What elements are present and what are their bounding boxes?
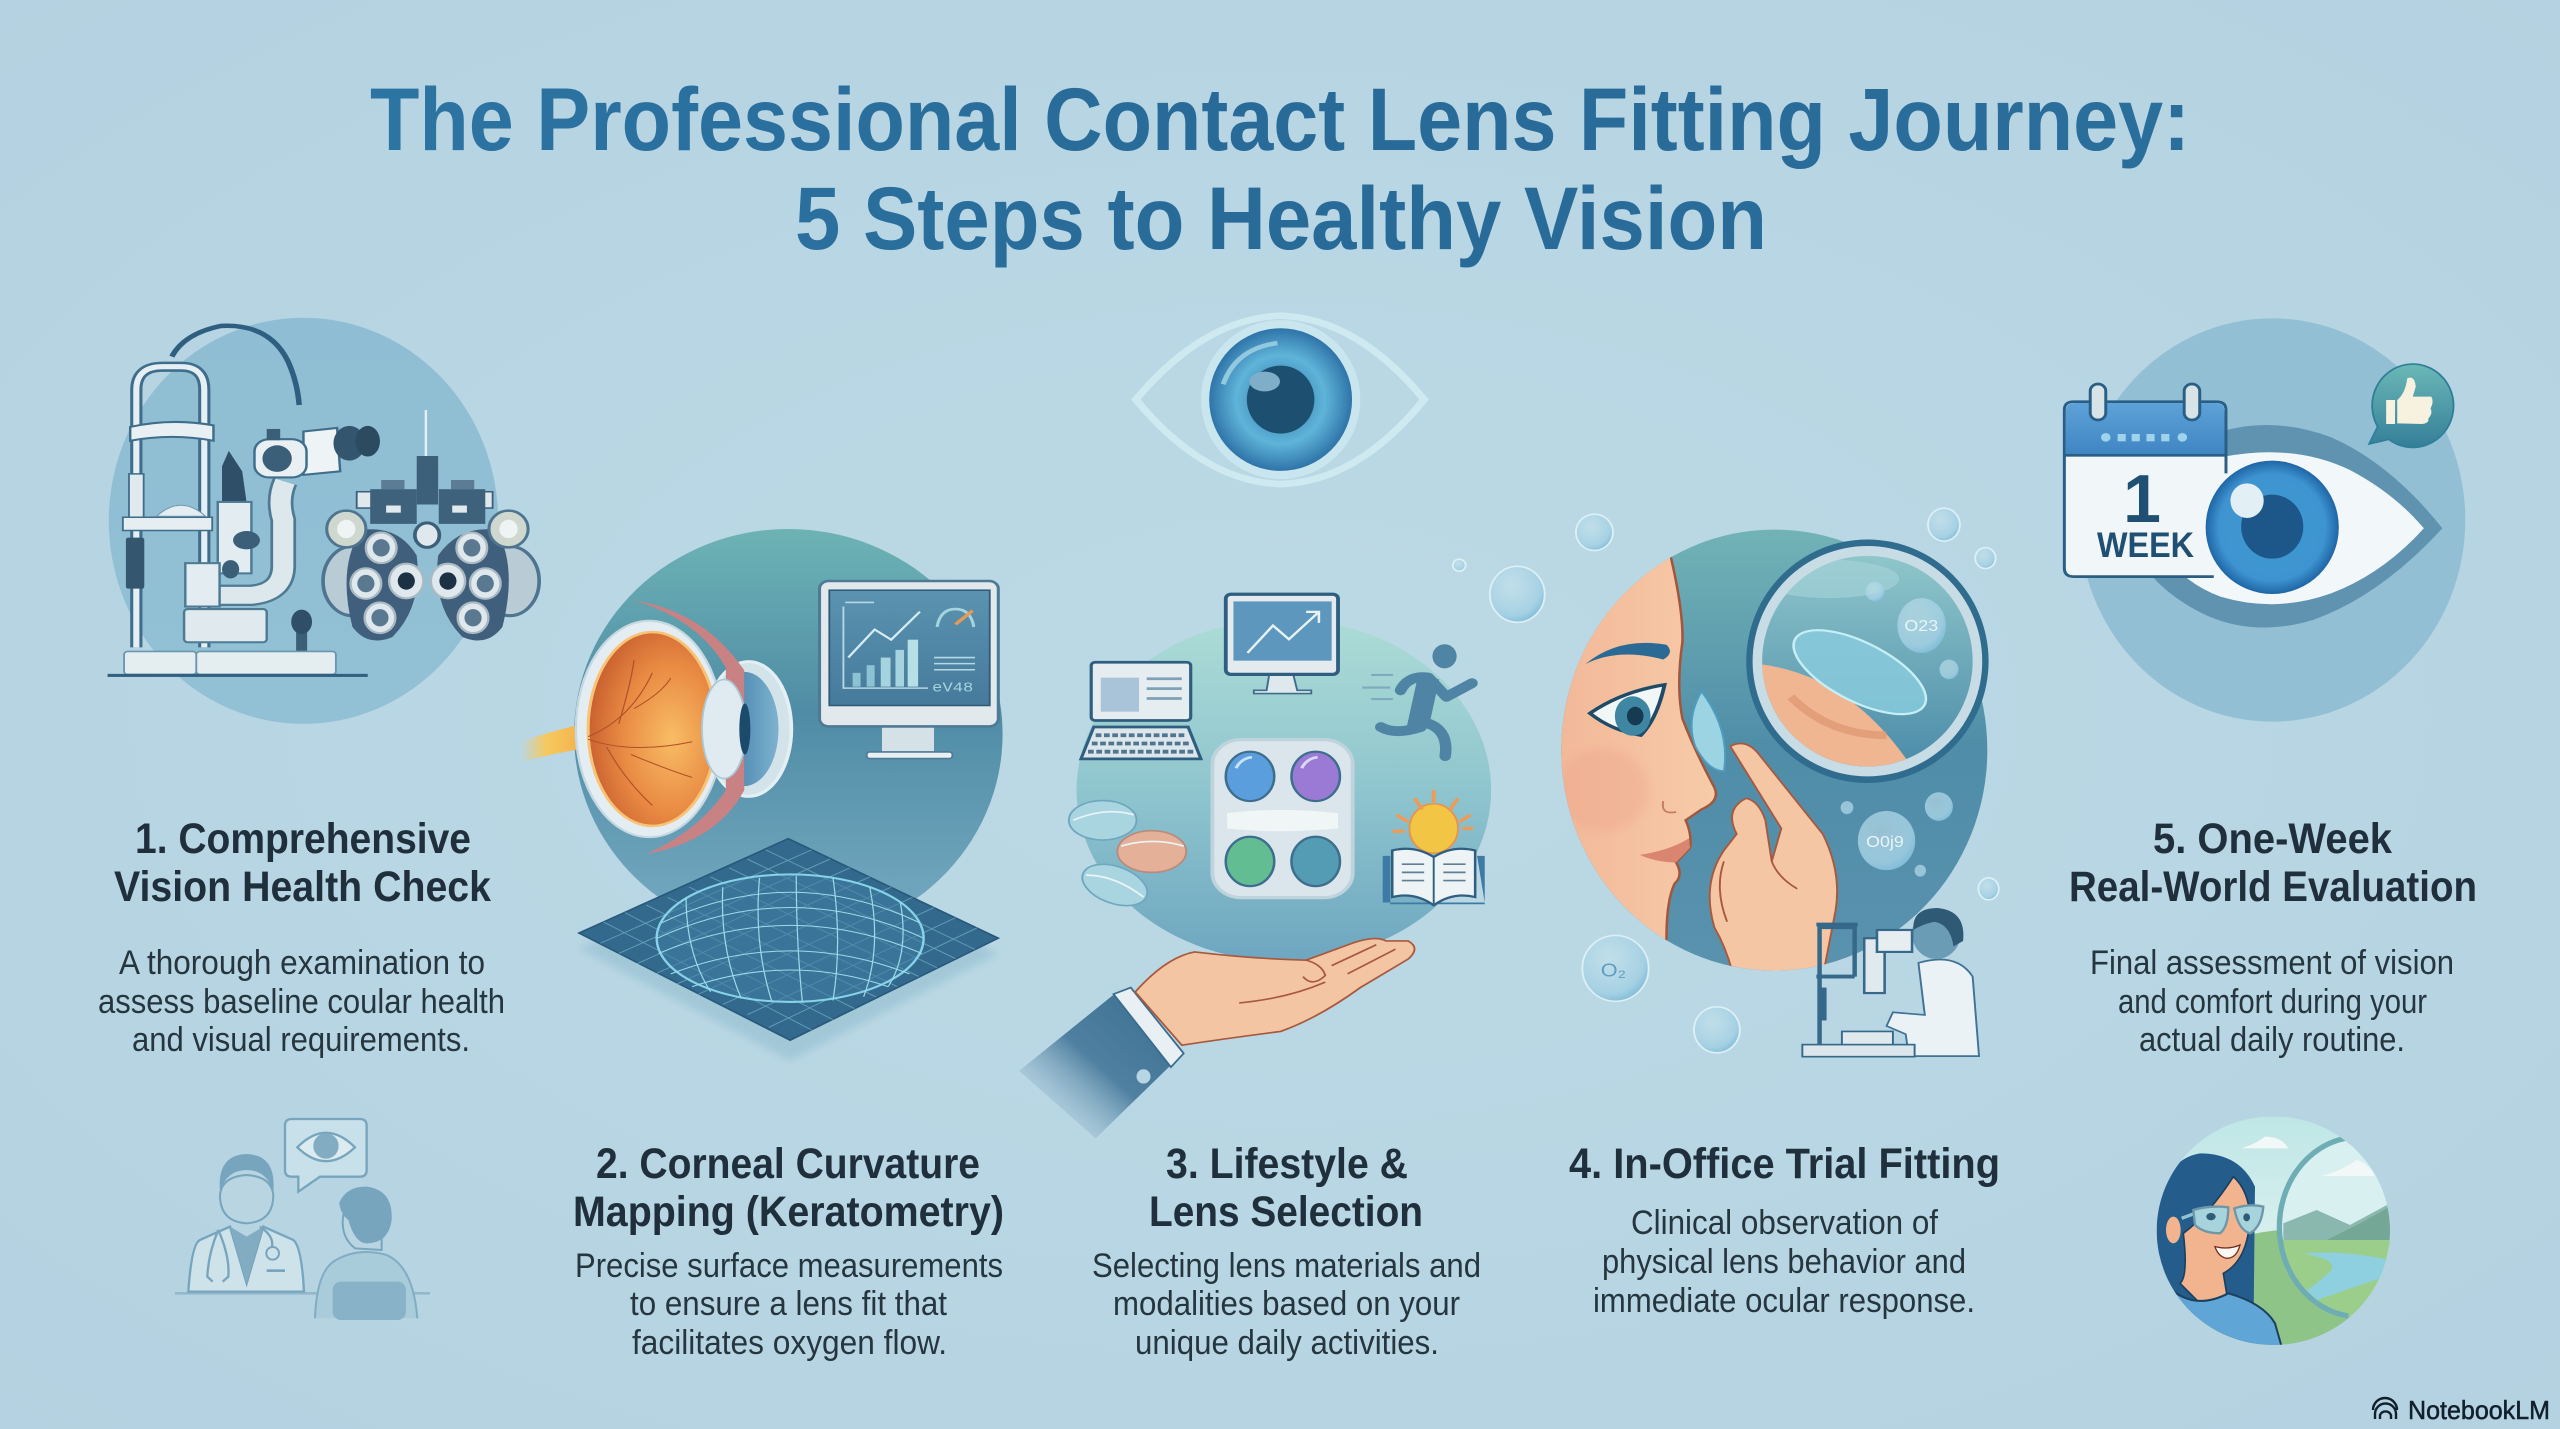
- step 5 text: 5. One-Week: [2153, 815, 2392, 863]
- icon: laptop: [1081, 662, 1201, 759]
- icon: book and sun: [1383, 790, 1485, 905]
- icon: hand: [1710, 743, 1837, 977]
- step 1 text: A thorough examination to: [119, 944, 485, 982]
- corneal topography plate: [579, 839, 998, 1061]
- panel: step 2 illustration, eye anatomy and corneal map: [521, 529, 1003, 1061]
- face profile: [1561, 556, 1718, 941]
- NotebookLM logo: NotebookLM: [2408, 1395, 2550, 1425]
- step 1 text: [98, 815, 505, 1059]
- icon: eye anatomy: [521, 600, 791, 854]
- icon: monitor: [1226, 594, 1338, 694]
- calendar text: [2097, 461, 2194, 565]
- icon: iris: [2206, 461, 2339, 594]
- step 3 text: modalities based on your: [1113, 1285, 1460, 1323]
- step 1 text: Vision Health Check: [114, 863, 491, 911]
- icon: central eye: [1136, 316, 1424, 484]
- step 5 text: [2069, 815, 2477, 1059]
- icon: lens on fingertip: [1692, 691, 1725, 771]
- icon: contact lenses: [1069, 801, 1186, 914]
- icon: woman with landscape view: [2157, 1117, 2390, 1347]
- step 2 text: to ensure a lens fit that: [630, 1285, 948, 1323]
- slit lamp: [108, 326, 380, 677]
- panel: step 1 illustration, slit lamp and phoropter: [108, 318, 539, 724]
- calendar text: WEEK: [2097, 526, 2194, 565]
- step 3 text: Selecting lens materials and: [1092, 1247, 1481, 1285]
- step 3 text: unique daily activities.: [1135, 1324, 1439, 1362]
- step 2 text: [573, 1140, 1004, 1362]
- icon: lens case: [1212, 740, 1353, 898]
- calendar text: 1: [2123, 461, 2161, 537]
- phoropter: [323, 410, 539, 641]
- step 3 text: [1092, 1140, 1481, 1362]
- panel: step 4 illustration, in-office trial fitting: [1453, 508, 1999, 1057]
- step 3 text: Lens Selection: [1149, 1188, 1423, 1236]
- step 4 text: Clinical observation of: [1631, 1204, 1938, 1242]
- step 4 text: physical lens behavior and: [1602, 1243, 1966, 1281]
- title: 5 Steps to Healthy Vision: [795, 168, 1767, 268]
- icon: calendar: [2064, 384, 2226, 577]
- oxygen bubbles inside circle: O0j9: [1866, 833, 1904, 851]
- step 1 text: 1. Comprehensive: [135, 815, 471, 863]
- title: The Professional Contact Lens Fitting Journey:: [370, 69, 2190, 169]
- step 5 text: actual daily routine.: [2139, 1021, 2405, 1059]
- icon: runner: [1362, 644, 1472, 756]
- icon: open hand: [1019, 939, 1415, 1138]
- step 1 text: assess baseline coular health: [98, 983, 505, 1021]
- icon: monitor with chart: eV48: [932, 680, 973, 696]
- step 5 text: and comfort during your: [2118, 983, 2427, 1021]
- step 2 text: 2. Corneal Curvature: [596, 1140, 980, 1188]
- panel: step 5 illustration, calendar and eye: [2064, 318, 2465, 722]
- step 2 text: Precise surface measurements: [575, 1247, 1003, 1285]
- icon: eye lids and sclera: [2154, 425, 2442, 628]
- icon: monitor with chart: [820, 581, 998, 759]
- step 4 text: 4. In-Office Trial Fitting: [1569, 1140, 2000, 1188]
- floating bubbles: [1453, 508, 1999, 1053]
- step 5 text: Real-World Evaluation: [2069, 863, 2477, 911]
- icon: magnifier with lens: O23: [1904, 617, 1938, 635]
- title: [370, 69, 2190, 268]
- panel: step 3 illustration, lifestyle and lens selection: [1019, 594, 1491, 1138]
- step 4 text: immediate ocular response.: [1593, 1282, 1975, 1320]
- icon: magnifier with lens: [1746, 539, 1989, 783]
- step 3 text: 3. Lifestyle &: [1166, 1140, 1408, 1188]
- oxygen bubbles inside circle: [1841, 792, 1953, 877]
- icon: clinician at slit lamp: [1802, 908, 1979, 1057]
- step 2 text: Mapping (Keratometry): [573, 1188, 1004, 1236]
- step 5 text: Final assessment of vision: [2090, 944, 2454, 982]
- icon: thumbs up bubble: [2369, 364, 2454, 447]
- step 4 text: [1569, 1140, 2000, 1320]
- O2 label: O₂: [1601, 961, 1626, 981]
- step 2 text: facilitates oxygen flow.: [632, 1324, 947, 1362]
- step 1 text: and visual requirements.: [132, 1021, 470, 1059]
- icon: doctor and patient consultation: [175, 1119, 430, 1320]
